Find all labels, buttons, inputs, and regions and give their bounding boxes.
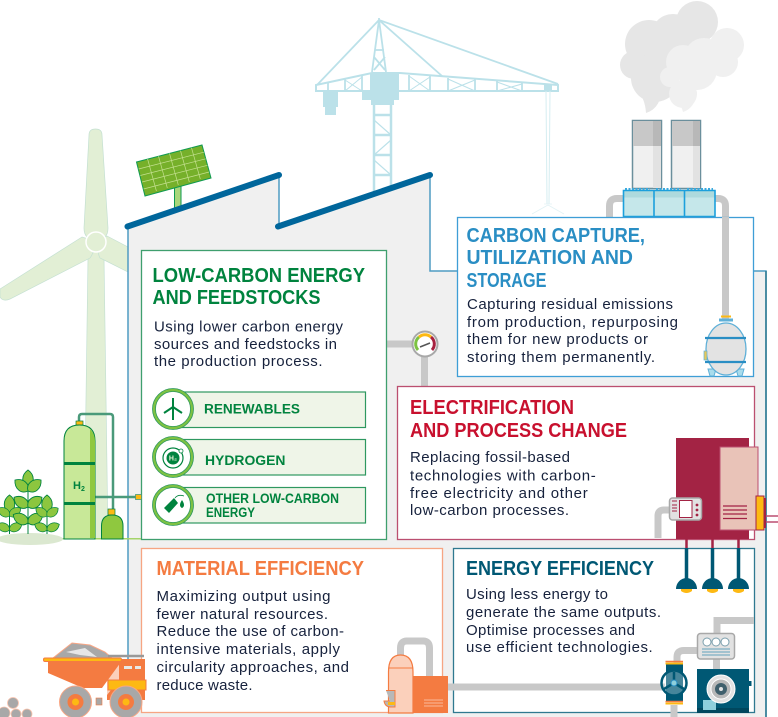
pipe to storage tank bbox=[722, 217, 729, 320]
material process unit bbox=[384, 641, 448, 713]
panel: energy efficiency bbox=[454, 548, 754, 712]
gauge with pipes bbox=[387, 332, 438, 388]
heading: carbon capture: STORAGE bbox=[466, 270, 546, 292]
construction crane bbox=[316, 18, 564, 214]
text: electrification description: low-carbon processes. bbox=[410, 502, 569, 519]
text: energy efficiency description bbox=[466, 586, 661, 656]
text: material efficiency description: Maximizing output using bbox=[156, 588, 330, 605]
text: carbon capture description: Capturing residual emissions bbox=[467, 296, 673, 313]
text: material efficiency description: reduce waste. bbox=[156, 677, 252, 694]
panel: material efficiency bbox=[142, 548, 442, 712]
pipes to carbon capture unit bbox=[610, 198, 726, 222]
smoke clouds bbox=[620, 1, 744, 113]
text: electrification description bbox=[410, 449, 596, 519]
valve bbox=[662, 662, 686, 704]
text: material efficiency description: fewer natural resources. bbox=[156, 606, 328, 623]
energy machinery bbox=[662, 620, 754, 717]
icon: electric furnace bbox=[658, 438, 778, 539]
item: renewables: RENEWABLES bbox=[204, 402, 300, 417]
mining dump truck bbox=[44, 643, 146, 717]
solar panel bbox=[136, 145, 211, 208]
plants bbox=[0, 470, 63, 545]
text: low-carbon description: the production process. bbox=[154, 353, 322, 370]
factory building bbox=[128, 174, 766, 717]
wind turbine bbox=[0, 129, 128, 539]
panel: carbon capture, utilization and storage bbox=[458, 217, 754, 376]
item: hydrogen: HYDROGEN bbox=[205, 453, 286, 468]
item: other low-carbon energy: OTHER LOW-CARBON bbox=[206, 491, 339, 506]
text: material efficiency description: intensive materials, apply bbox=[156, 641, 340, 658]
heading: carbon capture: CARBON CAPTURE, bbox=[466, 225, 645, 247]
heading: carbon capture bbox=[466, 225, 645, 292]
heading: electrification: AND PROCESS CHANGE bbox=[410, 420, 627, 442]
text: carbon capture description: from production, repurposing bbox=[467, 314, 678, 331]
text: low-carbon description bbox=[154, 318, 344, 370]
gauge panel bbox=[698, 634, 734, 659]
heading: energy efficiency: ENERGY EFFICIENCY bbox=[466, 558, 655, 580]
icon: hydrogen atom bbox=[163, 448, 183, 468]
text: energy efficiency description: Using less energy to bbox=[466, 586, 608, 603]
hydrogen tanks and pipes bbox=[64, 414, 142, 539]
heading: material efficiency: MATERIAL EFFICIENCY bbox=[156, 558, 365, 580]
item: hydrogen bbox=[152, 436, 366, 478]
text: material efficiency description: circularity approaches, and bbox=[156, 659, 349, 676]
text: carbon capture description bbox=[467, 296, 678, 366]
heading: low-carbon energy bbox=[152, 265, 366, 309]
text: electrification description: Replacing fossil-based bbox=[410, 449, 570, 466]
control panel bbox=[670, 498, 702, 520]
text: energy efficiency description: Optimise processes and bbox=[466, 622, 635, 639]
heading: carbon capture: UTILIZATION AND bbox=[466, 247, 633, 269]
icon: wind turbine bbox=[164, 398, 182, 420]
hydrogen tanks and pipes: H bbox=[73, 480, 81, 492]
heading: low-carbon energy: LOW-CARBON ENERGY bbox=[152, 265, 366, 287]
text: low-carbon description: sources and feedstocks in bbox=[154, 336, 337, 353]
text: material efficiency description: Reduce the use of carbon- bbox=[156, 623, 344, 640]
pendant lamps bbox=[676, 539, 749, 593]
heading: low-carbon energy: AND FEEDSTOCKS bbox=[152, 287, 320, 309]
text: material efficiency description bbox=[156, 588, 349, 694]
pump bbox=[697, 669, 752, 713]
panel: low-carbon energy and feedstocks bbox=[142, 250, 386, 540]
text: low-carbon description: Using lower carbon energy bbox=[154, 318, 344, 336]
control pipe bbox=[658, 510, 671, 538]
item: renewables bbox=[152, 388, 366, 430]
panel: electrification and process change bbox=[398, 386, 778, 540]
carbon capture filter units bbox=[624, 189, 715, 216]
roof bbox=[128, 175, 430, 226]
text: electrification description: free electricity and other bbox=[410, 485, 588, 502]
item: other low-carbon energy bbox=[152, 484, 366, 526]
ground line bbox=[0, 538, 141, 540]
text: energy efficiency description: generate the same outputs. bbox=[466, 604, 661, 621]
connecting pipe bbox=[448, 684, 665, 690]
icon: storage tank bbox=[704, 316, 746, 376]
text: electrification description: technologies with carbon- bbox=[410, 468, 596, 484]
heading: electrification: ELECTRIFICATION bbox=[410, 397, 574, 419]
text: carbon capture description: storing them permanently. bbox=[467, 349, 655, 366]
rocks bbox=[0, 698, 32, 717]
hydrogen tanks and pipes: 2 bbox=[81, 486, 85, 493]
heading: electrification bbox=[410, 397, 627, 442]
icon: fuel can and drop bbox=[164, 495, 184, 513]
chimneys bbox=[632, 120, 700, 188]
icon: hydrogen atom: H₂ bbox=[169, 456, 177, 462]
text: energy efficiency description: use efficient technologies. bbox=[466, 639, 653, 656]
item: other low-carbon energy: ENERGY bbox=[206, 505, 255, 520]
text: carbon capture description: them for new products or bbox=[467, 331, 648, 348]
